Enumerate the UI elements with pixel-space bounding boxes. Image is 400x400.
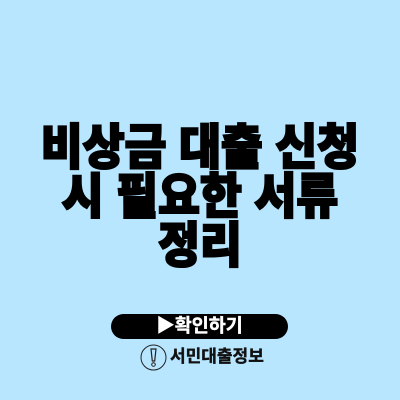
brand name: 서민대출정보 (170, 347, 264, 366)
button: confirm: ▶확인하기 (156, 315, 243, 336)
title: 비상금 대출 신청 (41, 120, 359, 174)
title: 시 필요한 서류 (62, 169, 338, 224)
title: 정리 (158, 218, 242, 272)
icon: exclamation circle (140, 344, 166, 370)
title (41, 120, 359, 272)
button: confirm (111, 314, 288, 339)
